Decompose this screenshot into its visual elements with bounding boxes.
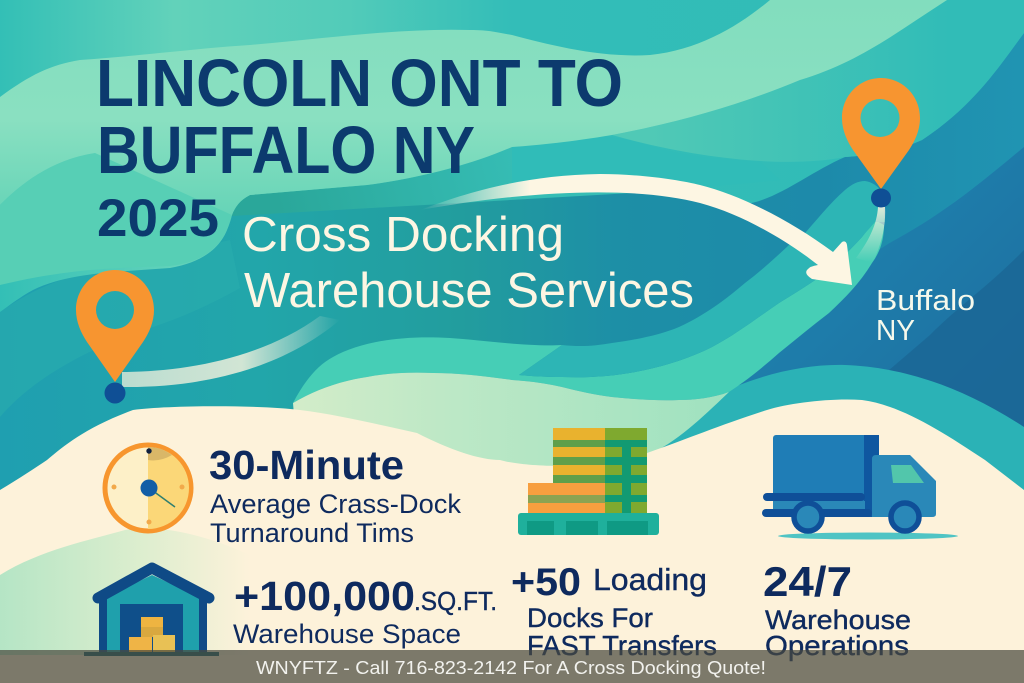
title bbox=[96, 46, 623, 248]
subtitle: Warehouse Services bbox=[244, 264, 694, 318]
Buffalo NY label: Buffalo bbox=[876, 285, 975, 317]
stat: warehouse space: +100,000 bbox=[234, 573, 415, 619]
stat: loading docks: FAST Transfers bbox=[527, 630, 717, 661]
mint band bbox=[293, 220, 884, 403]
stat: loading docks bbox=[511, 561, 717, 661]
stat: 24/7: Warehouse bbox=[765, 605, 911, 635]
icon: clock bbox=[105, 445, 191, 531]
cream lower panel bbox=[0, 400, 1024, 683]
icon: delivery truck bbox=[762, 435, 958, 540]
stat: warehouse space: .SQ.FT. bbox=[414, 586, 497, 616]
stat: warehouse space: Warehouse Space bbox=[233, 619, 461, 649]
location pin: Lincoln bbox=[76, 270, 154, 404]
footer bar: WNYFTZ - Call 716-823-2142 For A Cross Docking Quote! bbox=[256, 658, 766, 678]
subtitle: Cross Docking bbox=[242, 208, 564, 262]
teal band bbox=[519, 181, 885, 377]
route trail: Buffalo bbox=[856, 207, 885, 263]
Buffalo NY label: NY bbox=[876, 315, 915, 347]
title: BUFFALO NY bbox=[97, 113, 475, 188]
icon: warehouse bbox=[84, 568, 219, 656]
Buffalo NY label bbox=[876, 285, 975, 347]
stat: 30-minute: Turnaround Tims bbox=[210, 518, 414, 548]
stat: warehouse space bbox=[233, 573, 497, 649]
location pin: Buffalo bbox=[842, 78, 920, 208]
stat: 24/7: 24/7 bbox=[763, 558, 852, 605]
stat: 24/7: Operations bbox=[765, 630, 909, 661]
title: LINCOLN ONT TO bbox=[96, 46, 623, 121]
stat: 30-minute bbox=[209, 442, 462, 548]
stat: 30-minute: Average Crass-Dock bbox=[210, 489, 462, 519]
stat: loading docks: +50 bbox=[511, 561, 581, 604]
mint lower-left wash bbox=[0, 528, 260, 655]
icon: pallet stack bbox=[518, 428, 659, 535]
stat: loading docks: Docks For bbox=[527, 603, 653, 633]
route trail: Lincoln bbox=[122, 316, 340, 387]
route arrow to Buffalo bbox=[420, 174, 852, 285]
stat: loading docks: Loading bbox=[593, 562, 707, 597]
footer bar bbox=[0, 650, 1024, 683]
year: 2025 bbox=[97, 189, 219, 248]
stat: 24/7 bbox=[763, 558, 911, 661]
stat: 30-minute: 30-Minute bbox=[209, 442, 404, 488]
subtitle bbox=[242, 208, 694, 318]
